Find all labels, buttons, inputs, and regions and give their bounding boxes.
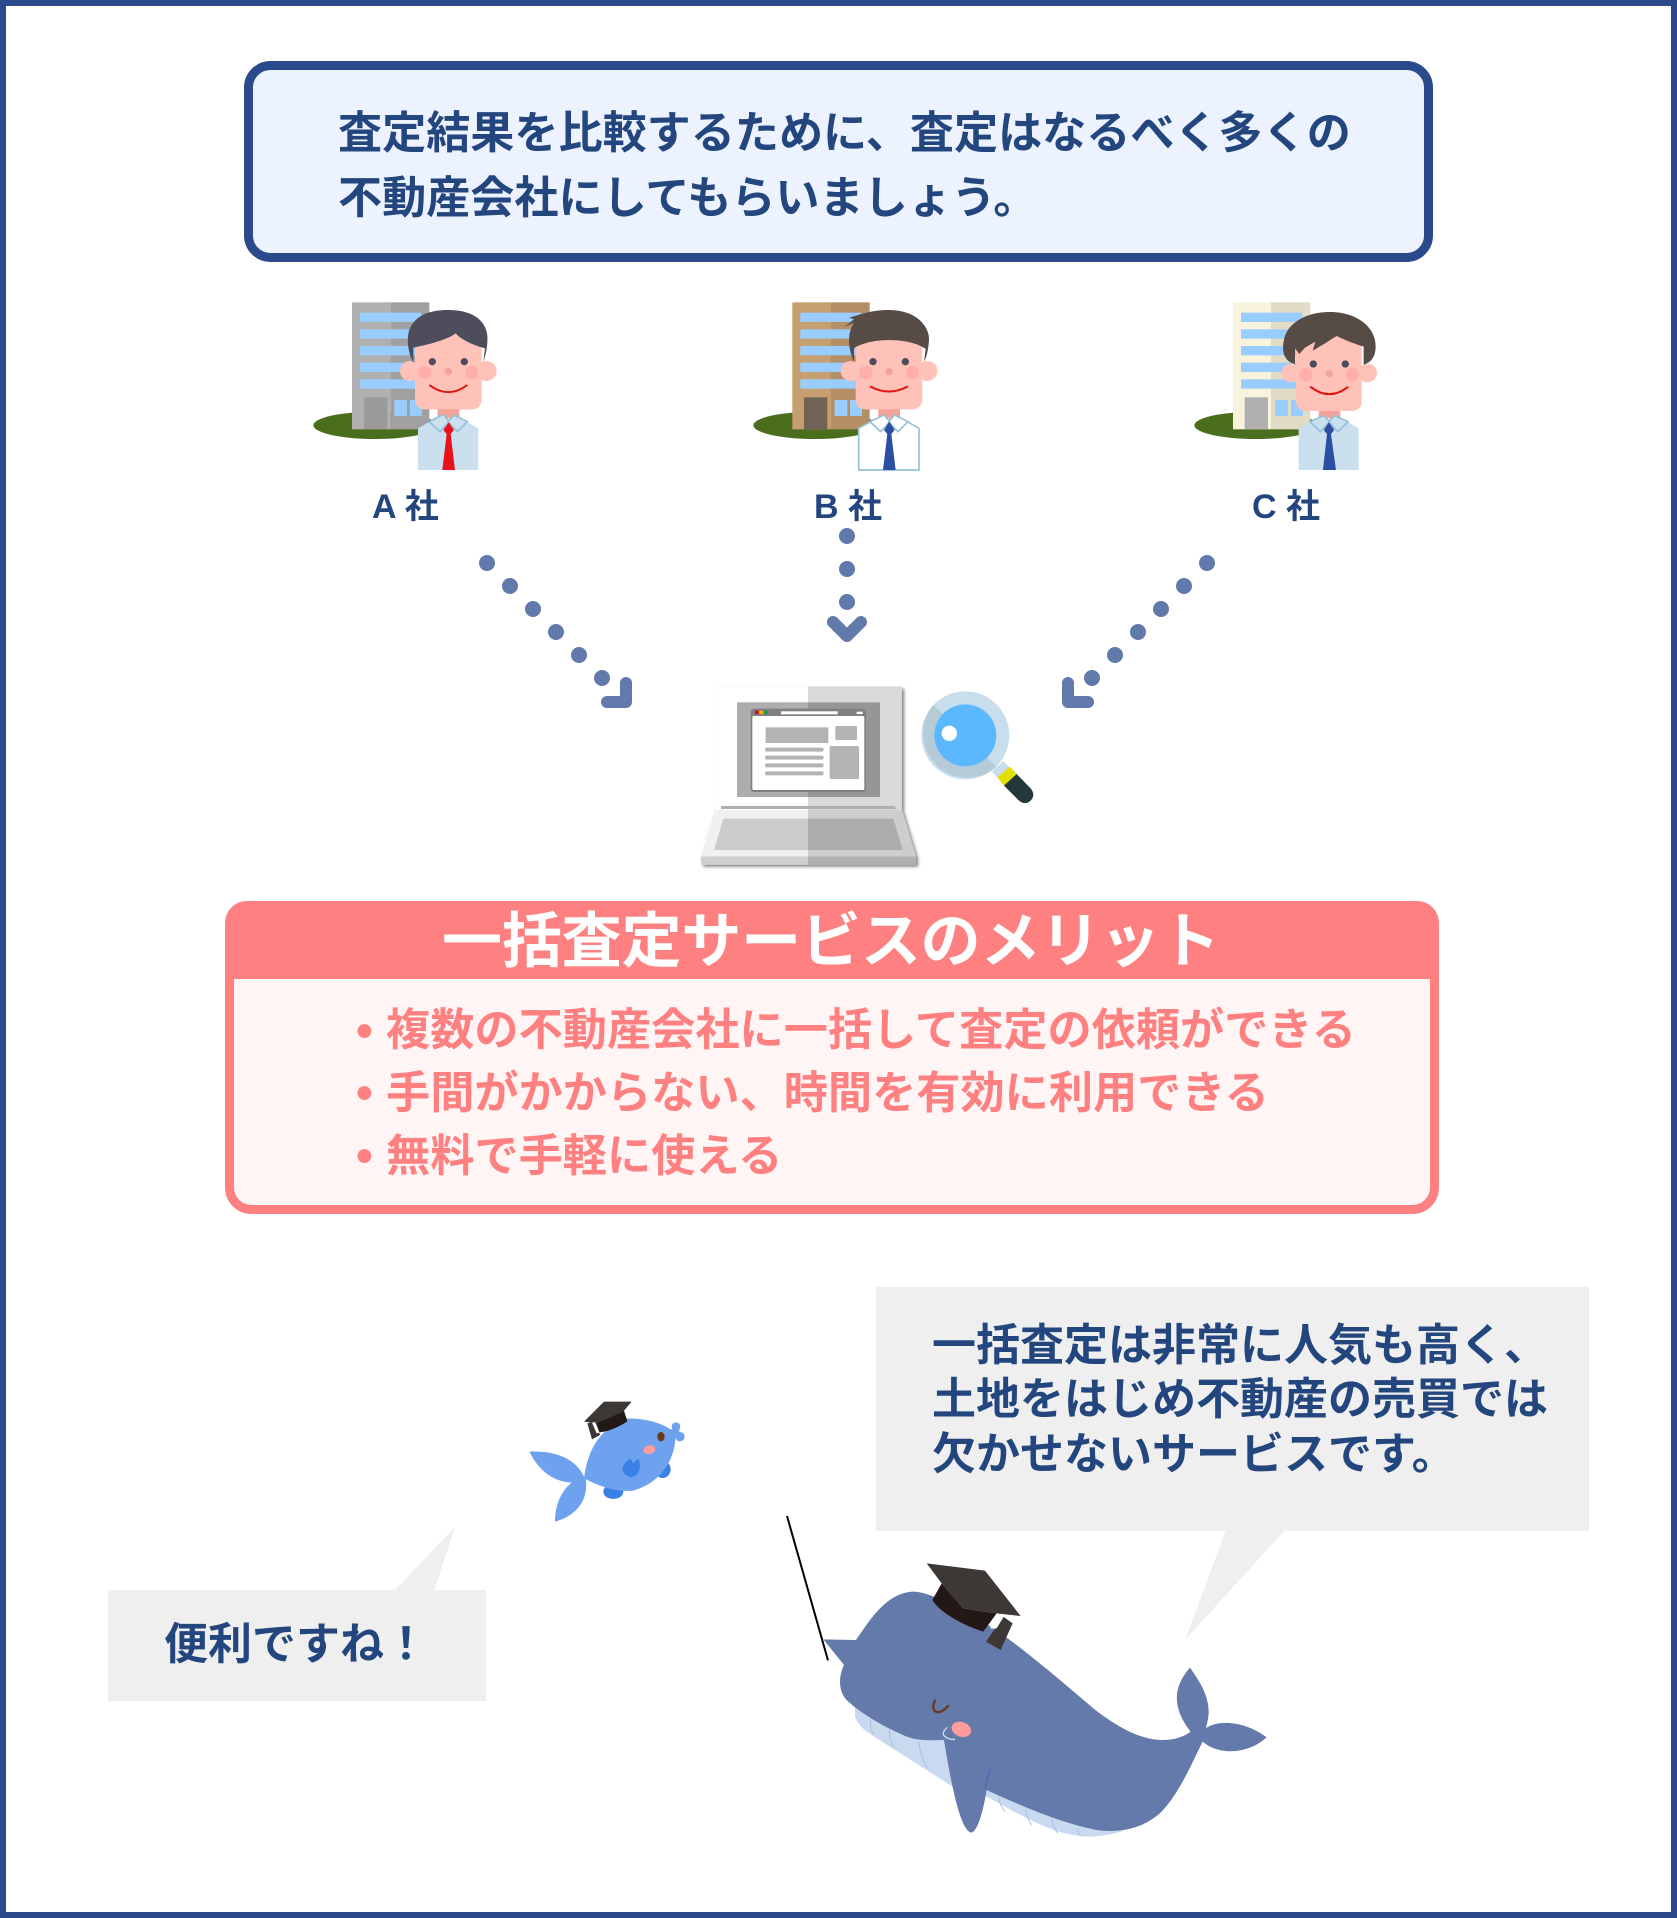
icon: company B building and person [753,302,937,470]
list: merits: 複数の不動産会社に一括して査定の依頼ができる [386,1006,1356,1055]
list: merits [356,1005,1356,1183]
arrow: from B [833,528,861,636]
icon: magnifying glass [921,691,1033,803]
icon: small fish with hat [529,1402,685,1522]
panel: top message [248,66,1428,258]
label: B: B 社 [814,488,882,526]
heading: merits: 一括査定サービスのメリット [442,908,1220,975]
text: whale speech: 欠かせないサービスです。 [932,1430,1456,1479]
list: merits: • [356,1005,373,1058]
panel header [225,901,1439,979]
pointer stick [787,1516,828,1660]
label: A: A 社 [372,488,439,526]
callout: whale speech [876,1287,1589,1640]
text: top message [338,109,1351,223]
panel: merits [225,901,1439,1210]
text: whale speech: 土地をはじめ不動産の売買では [932,1375,1548,1424]
callout: fish speech [108,1527,486,1701]
list: merits: 手間がかからない、時間を有効に利用できる [386,1069,1269,1118]
text: fish speech: 便利ですね！ [164,1620,428,1669]
label: C: C 社 [1252,488,1320,526]
text: top message: 査定結果を比較するために、査定はなるべく多くの [338,109,1351,158]
list: merits: • [356,1067,373,1120]
icon: company C building and person [1194,302,1377,470]
arrow: from A [479,555,626,702]
text: whale speech: 一括査定は非常に人気も高く、 [932,1321,1548,1370]
text: whale speech [932,1321,1548,1479]
list: merits: • [356,1130,373,1183]
list: merits: 無料で手軽に使える [386,1132,782,1181]
text: top message: 不動産会社にしてもらいましょう。 [338,174,1037,223]
icon: whale with hat and pointer [787,1516,1267,1837]
icon: laptop [701,687,916,865]
arrow: from C [1068,555,1215,702]
icon: company A building and person [313,302,497,470]
